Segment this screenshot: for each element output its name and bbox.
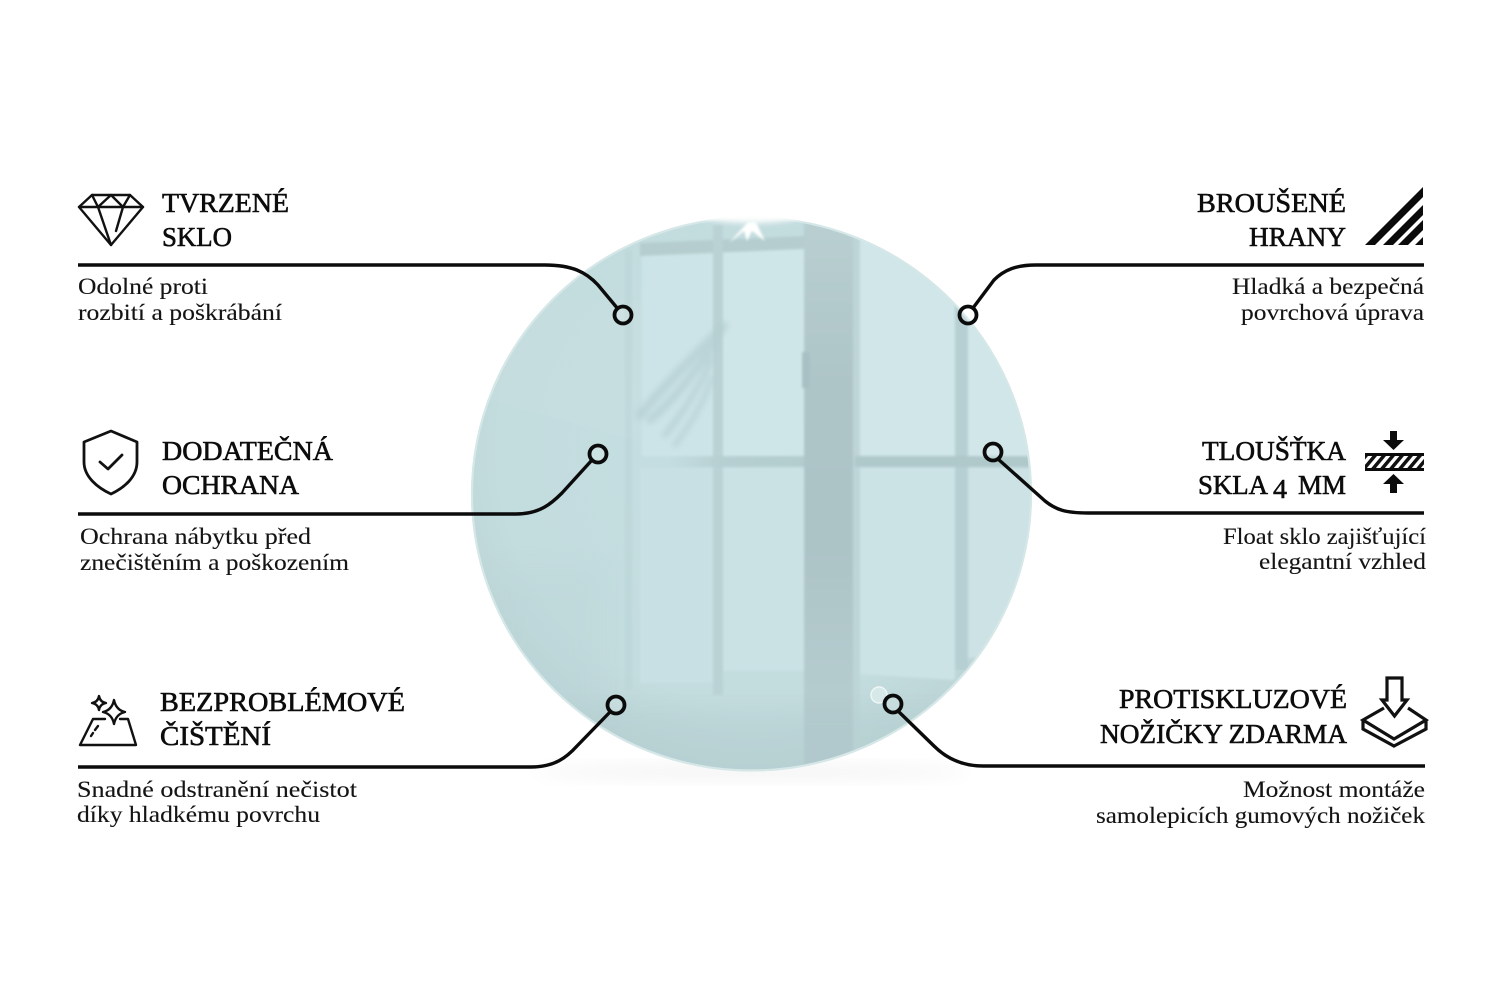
heading: Broušené hrany: HRANY [1249, 222, 1346, 252]
heading: Tloušťka skla 4 mm: MM [1298, 470, 1346, 500]
heading: Tloušťka skla 4 mm [1198, 436, 1346, 504]
description: Odolné proti [78, 274, 208, 299]
heading: Protiskluzové nožičky zdarma: PROTISKLUZOVÉ [1119, 684, 1347, 714]
panel: easy cleaning [77, 687, 624, 827]
heading: Dodatečná ochrana: DODATEČNÁ [162, 436, 334, 466]
product: round glass board [470, 207, 1038, 790]
description: Ochrana nábytku před [80, 524, 312, 549]
description: samolepicích gumových nožiček [1096, 803, 1426, 828]
heading: Tloušťka skla 4 mm: 4 [1273, 474, 1288, 504]
reflected plant [640, 326, 724, 445]
description: povrchová úprava [1241, 300, 1424, 325]
connector line [78, 446, 606, 514]
heading: Dodatečná ochrana: OCHRANA [162, 470, 300, 500]
description: Float sklo zajišťující [1223, 524, 1427, 549]
panel: polished edges [960, 187, 1424, 325]
description [77, 777, 358, 827]
heading: Tloušťka skla 4 mm: SKLA [1198, 470, 1268, 500]
description: Hladká a bezpečná [1232, 274, 1424, 299]
icon: shield with check [84, 431, 137, 494]
description [80, 524, 349, 575]
heading: Broušené hrany [1197, 188, 1346, 252]
heading: Tvrzené sklo: SKLO [162, 222, 232, 252]
description: Možnost montáže [1243, 777, 1425, 802]
connector line [78, 265, 632, 324]
icon: arrow pressing on layer [1363, 678, 1426, 746]
connector line [884, 696, 1425, 766]
heading: Tloušťka skla 4 mm: TLOUŠŤKA [1202, 436, 1346, 466]
description [78, 274, 283, 325]
heading: Bezproblémové čištění [160, 687, 405, 751]
icon: thickness arrows [1365, 431, 1424, 493]
heading: Bezproblémové čištění: BEZPROBLÉMOVÉ [160, 687, 405, 717]
description: elegantní vzhled [1259, 549, 1427, 574]
description: díky hladkému povrchu [77, 802, 321, 827]
panel: glass thickness [984, 431, 1427, 574]
connector line [984, 444, 1424, 513]
glare on glass top [702, 207, 802, 243]
icon: diagonal stripes [1365, 187, 1423, 245]
heading: Protiskluzové nožičky zdarma [1100, 684, 1347, 749]
connector line [960, 265, 1424, 324]
description [1096, 777, 1426, 828]
panel: tempered glass [78, 188, 632, 325]
heading: Bezproblémové čištění: ČIŠTĚNÍ [160, 721, 271, 751]
description [1232, 274, 1424, 325]
heading: Tvrzené sklo [162, 188, 289, 252]
heading: Broušené hrany: BROUŠENÉ [1197, 188, 1346, 218]
heading: Dodatečná ochrana [162, 436, 334, 500]
heading: Tvrzené sklo: TVRZENÉ [162, 188, 289, 218]
description: Snadné odstranění nečistot [77, 777, 358, 802]
description: znečištěním a poškozením [80, 550, 349, 575]
panel: additional protection [78, 431, 606, 575]
heading: Protiskluzové nožičky zdarma: NOŽIČKY ZDARMA [1100, 719, 1347, 749]
icon: diamond [79, 195, 143, 245]
description: rozbití a poškrábání [78, 300, 283, 325]
icon: sparkling surface [80, 696, 136, 745]
description [1223, 524, 1427, 574]
connector line [78, 696, 624, 767]
anti-slip foot [871, 687, 887, 703]
panel: anti-slip feet [884, 678, 1426, 828]
